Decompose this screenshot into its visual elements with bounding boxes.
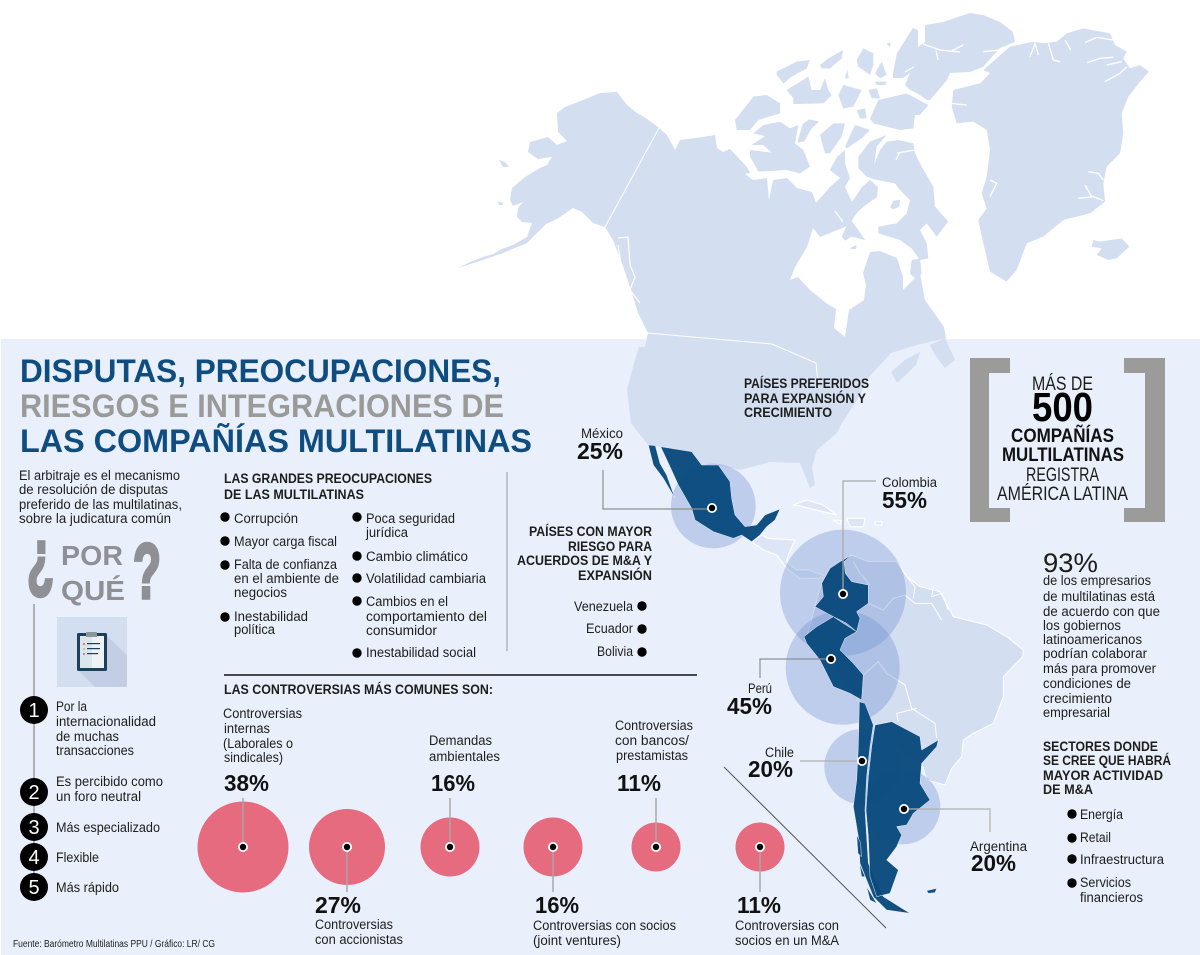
sectors heading: SECTORES DONDE: [1043, 739, 1158, 754]
title: LAS COMPAÑÍAS MULTILATINAS: [20, 423, 532, 459]
reason 3: Más especializado: [56, 820, 160, 835]
heading: ¿por qué?: ¿: [27, 512, 54, 600]
map: North America: [458, 13, 1149, 488]
text block: 93%: los gobiernos: [1043, 618, 1121, 633]
callout: Perú 45%: Perú: [748, 681, 772, 696]
reason 3: 3: [28, 817, 40, 839]
map: Baffin Island: [858, 135, 948, 260]
map: Iceland: [1092, 238, 1129, 260]
map: St Lawrence islands: [498, 160, 955, 383]
sectors heading: [1043, 739, 1171, 797]
map: internal borders: [853, 562, 948, 738]
risk heading: [517, 524, 652, 583]
concerns list column 1: [220, 511, 339, 637]
title: DISPUTAS, PREOCUPACIONES,: [20, 353, 501, 389]
intro text: sobre la judicatura común: [19, 511, 171, 526]
bubble: 38% internal: (Laborales o: [223, 736, 293, 751]
bubble: 38% internal: internas: [224, 721, 270, 736]
concerns list column 1: Inestabilidad: [234, 609, 308, 624]
title: [20, 353, 532, 459]
text block: 93%: 93%: [1043, 548, 1098, 578]
reason 1: 1: [28, 700, 40, 722]
callout: bracket 500 companies: 500: [1032, 384, 1093, 430]
heading: ¿por qué?: ?: [133, 527, 161, 615]
text block: 93%: de multilatinas está: [1043, 589, 1155, 604]
bubble: 11% banks: Controversias: [615, 718, 693, 733]
callout: Colombia 55%: [838, 475, 937, 599]
reason 2: un foro neutral: [56, 789, 141, 804]
concerns heading: LAS GRANDES PREOCUPACIONES: [224, 471, 432, 486]
text block: 93%: empresarial: [1043, 705, 1110, 720]
reason 2: 2: [28, 782, 40, 804]
map: Alaska and US borders: [605, 128, 818, 383]
intro text: de resolución de disputas: [19, 482, 168, 497]
callout: Chile 20%: Chile: [765, 745, 794, 760]
sectors list: Infraestructura: [1080, 852, 1164, 867]
bubble: 27% shareholders: 27%: [315, 892, 361, 918]
reason 2: [20, 774, 163, 806]
concerns heading: [224, 471, 432, 502]
reason 4: [20, 843, 99, 871]
bubble: 16% joint ventures: Controversias con socios: [533, 918, 676, 933]
reason 1: [20, 696, 156, 758]
sectors list: Retail: [1080, 830, 1111, 845]
bubble: 16% environmental: ambientales: [429, 749, 500, 764]
risk list: Venezuela: [574, 599, 633, 614]
bubble: 11% M&A partners: socios en un M&A: [735, 933, 839, 948]
text block: 93%: [1043, 548, 1160, 720]
map: South America land: [807, 555, 1023, 785]
timeline: reasons: [20, 604, 163, 901]
callout: Colombia 55%: 55%: [882, 487, 927, 513]
concerns list column 1: negocios: [234, 585, 287, 600]
reason 1: Por la: [56, 699, 87, 714]
concerns list column 1: política: [234, 622, 275, 637]
source note: Fuente: Barómetro Multilatinas PPU / Gráfico: LR/ CG: [13, 939, 215, 950]
heading: ¿por qué?: QUÉ: [61, 575, 125, 606]
bubble: 16% joint ventures: [524, 818, 676, 948]
bubble: 11% banks: con bancos/: [615, 733, 689, 748]
risk heading: ACUERDOS DE M&A Y: [517, 553, 652, 568]
intro text: [19, 468, 182, 526]
sectors heading: MAYOR ACTIVIDAD: [1043, 768, 1163, 783]
concerns list column 2: Poca seguridad: [366, 511, 455, 526]
bubble: 16% joint ventures: (joint ventures): [533, 933, 621, 948]
reason 1: internacionalidad: [56, 714, 156, 729]
callout: bracket 500 companies: COMPAÑÍAS: [1011, 425, 1114, 447]
callout: México 25%: 25%: [577, 438, 623, 464]
bubble: 38% internal: sindicales): [224, 750, 283, 765]
map: mainland: [458, 92, 946, 488]
bubble: 11% M&A partners: 11%: [737, 892, 781, 918]
bubble: 11% banks: prestamistas: [616, 748, 688, 763]
bubble: 38% internal: Controversias: [223, 706, 302, 721]
sectors list: financieros: [1080, 890, 1143, 905]
bubble: 11% M&A partners: Controversias con: [735, 918, 839, 933]
bubble: 16% environmental: 16%: [431, 770, 475, 796]
callout: Argentina 20%: 20%: [971, 850, 1016, 876]
title: RIESGOS E INTEGRACIONES DE: [20, 388, 504, 424]
panel: risk countries: [517, 524, 652, 659]
concerns list column 2: Cambios en el: [366, 594, 448, 609]
text block: 93%: condiciones de: [1043, 676, 1131, 691]
bubble: 38% internal: [198, 706, 302, 892]
callout: Chile 20%: 20%: [748, 756, 793, 782]
sectors heading: DE M&A: [1043, 782, 1093, 797]
risk list: Bolivia: [597, 644, 633, 659]
panel: sectors: [1043, 739, 1171, 905]
bubbles: country percentages: [671, 464, 940, 844]
reason 3: [20, 813, 160, 841]
reason 5: Más rápido: [56, 880, 119, 895]
panel: controversies: [198, 682, 839, 948]
bubble: 27% shareholders: Controversias: [315, 917, 393, 932]
bubble: 38% internal: 38%: [224, 770, 269, 796]
reason 4: Flexible: [56, 850, 99, 865]
heading: preferred countries: PARA EXPANSIÓN Y: [744, 391, 866, 406]
reason 4: 4: [28, 847, 40, 869]
concerns list column 2: Cambio climático: [366, 549, 468, 564]
bubble: 16% environmental: Demandas: [429, 733, 492, 748]
map: Latin America: [648, 445, 1023, 913]
callout: bracket 500 companies: [970, 358, 1165, 522]
callout: bracket 500 companies: AMÉRICA LATINA: [997, 484, 1128, 505]
risk heading: EXPANSIÓN: [578, 568, 652, 583]
reason 5: 5: [28, 877, 40, 899]
callout: México 25%: [577, 426, 717, 513]
heading: preferred countries: [744, 376, 869, 420]
callout: Perú 45%: 45%: [727, 693, 772, 719]
text block: 93%: latinoamericanos: [1043, 632, 1142, 647]
risk heading: PAÍSES CON MAYOR: [529, 524, 652, 539]
bubble: 27% shareholders: con accionistas: [315, 932, 403, 947]
concerns list column 1: en el ambiente de: [234, 571, 339, 586]
callout: bracket 500 companies: MULTILATINAS: [1002, 445, 1124, 466]
callout: Argentina 20%: [899, 804, 1027, 876]
reason 1: transacciones: [56, 743, 134, 758]
concerns list column 2: [352, 511, 487, 660]
concerns list column 2: consumidor: [366, 623, 438, 638]
reason 2: Es percibido como: [56, 774, 163, 789]
text block: 93%: de acuerdo con que: [1043, 604, 1160, 619]
bubble: 27% shareholders: [309, 809, 403, 947]
callout: Argentina 20%: Argentina: [970, 839, 1027, 854]
callout: bracket 500 companies: REGISTRA: [1026, 465, 1099, 486]
sectors list: Servicios: [1080, 875, 1131, 890]
bubble: 16% environmental: [420, 733, 500, 876]
bubble: 16% joint ventures: 16%: [535, 892, 579, 918]
risk list: Ecuador: [586, 621, 633, 636]
icon: clipboard: [57, 617, 127, 687]
callout: bracket 500 companies: MÁS DE: [1032, 374, 1093, 395]
reason 5: [20, 873, 119, 901]
intro text: preferido de las multilatinas,: [19, 497, 182, 512]
map: Ellesmere Island: [893, 13, 1015, 100]
sectors heading: SE CREE QUE HABRÁ: [1043, 753, 1171, 768]
concerns list column 1: Falta de confianza: [234, 557, 337, 572]
intro text: El arbitraje es el mecanismo: [19, 468, 180, 483]
callout: Chile 20%: [748, 745, 867, 782]
text block: 93%: crecimiento: [1043, 691, 1112, 706]
map: highlighted countries: [648, 445, 938, 913]
concerns list column 1: Mayor carga fiscal: [234, 534, 337, 549]
heading: ¿por qué?: [27, 512, 161, 615]
map: Canada inlets: [618, 44, 960, 303]
text block: 93%: podrían colaborar: [1043, 646, 1147, 661]
concerns list column 2: Volatilidad cambiaria: [366, 571, 486, 586]
map: Greenland: [950, 28, 1149, 282]
background panel: [1, 339, 1200, 955]
heading: ¿por qué?: POR: [61, 540, 123, 571]
callout: Perú 45%: [727, 654, 836, 719]
concerns list column 2: comportamiento del: [366, 609, 487, 624]
bubble: 11% banks: 11%: [617, 770, 661, 796]
map: Central America and Caribbean: [752, 500, 882, 578]
heading: preferred countries: CRECIMIENTO: [744, 405, 832, 420]
callout: México 25%: México: [581, 426, 623, 441]
sectors list: Energía: [1080, 807, 1123, 822]
concerns heading: DE LAS MULTILATINAS: [224, 487, 364, 502]
risk heading: RIESGO PARA: [568, 539, 652, 554]
map: Arctic archipelago: [735, 42, 948, 280]
panel: concerns: [220, 471, 487, 660]
concerns list column 2: Inestabilidad social: [366, 645, 476, 660]
concerns list column 2: jurídica: [365, 525, 408, 540]
text block: 93%: de los empresarios: [1043, 573, 1151, 588]
bubble: 11% banks: [615, 718, 693, 872]
heading: preferred countries: PAÍSES PREFERIDOS: [744, 376, 869, 391]
sectors list: [1067, 807, 1164, 905]
concerns list column 1: Corrupción: [234, 511, 298, 526]
text block: 93%: más para promover: [1043, 661, 1156, 676]
reason 1: de muchas: [56, 729, 119, 744]
controversies heading: LAS CONTROVERSIAS MÁS COMUNES SON:: [224, 682, 493, 697]
callout: Colombia 55%: Colombia: [882, 475, 937, 490]
bubble: 11% M&A partners: [735, 822, 839, 948]
risk list: [574, 599, 647, 659]
